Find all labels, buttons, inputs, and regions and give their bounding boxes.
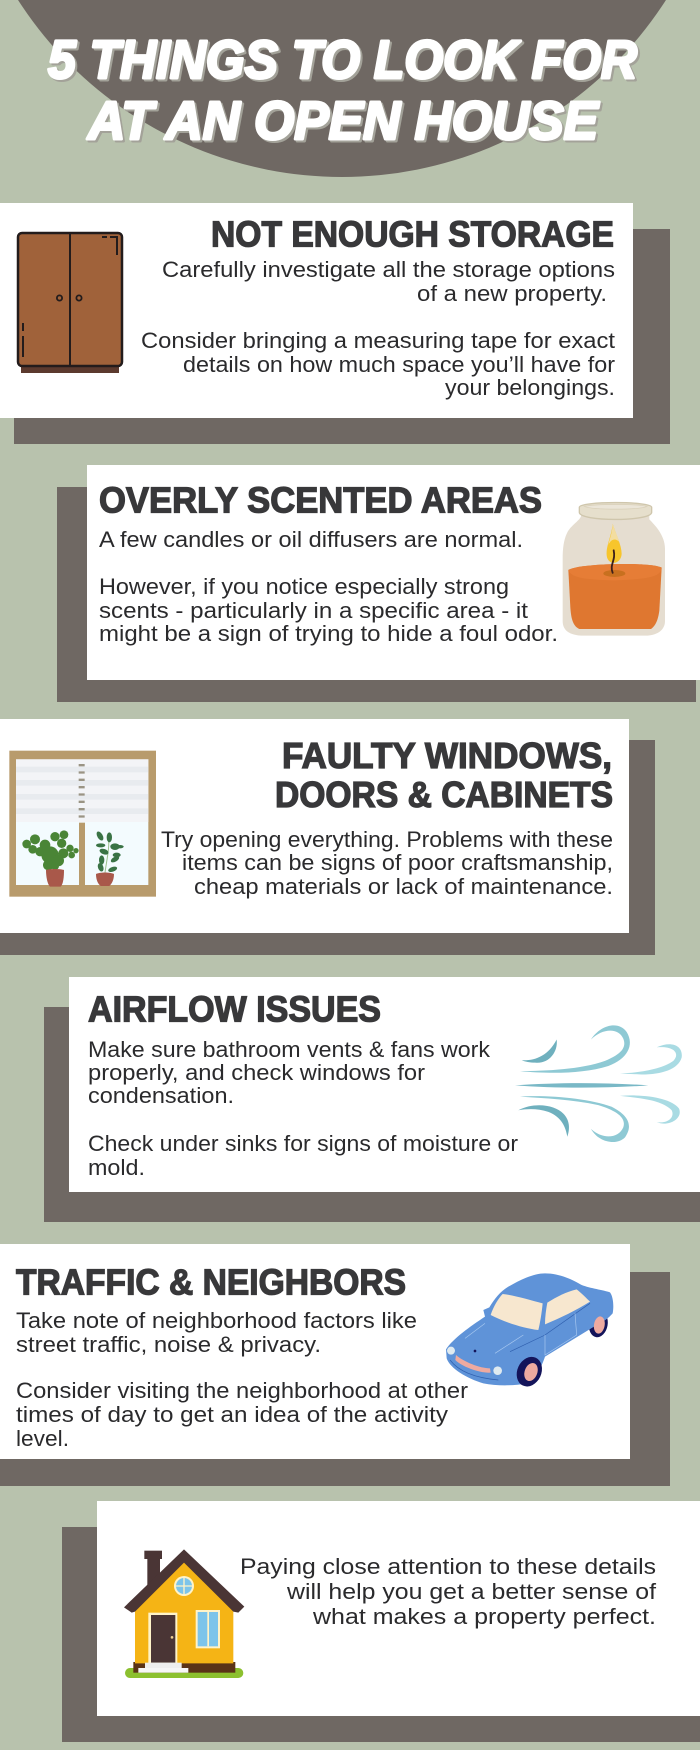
body text: your belongings. [445, 375, 615, 400]
body text: Check under sinks for signs of moisture or [88, 1131, 518, 1156]
heading: TRAFFIC & NEIGHBORS [16, 1262, 406, 1302]
panel: not enough storage [0, 203, 670, 444]
body text: scents - particularly in a specific area - it [99, 598, 528, 623]
body text: Paying close attention to these details [240, 1554, 656, 1579]
panel: traffic and neighbors [0, 1244, 670, 1486]
body text: level. [16, 1426, 69, 1451]
title: AT AN OPEN HOUSE [86, 91, 600, 151]
body text: condensation. [88, 1083, 234, 1108]
icon: cabinet [18, 232, 122, 373]
heading: AIRFLOW ISSUES [88, 988, 381, 1030]
body text: properly, and check windows for [88, 1060, 425, 1085]
heading: FAULTY WINDOWS, [282, 735, 612, 776]
panel: overly scented areas [57, 465, 700, 702]
body text: Carefully investigate all the storage options [162, 257, 615, 282]
heading: OVERLY SCENTED AREAS [99, 480, 542, 520]
body text: will help you get a better sense of [286, 1579, 657, 1604]
heading: DOORS & CABINETS [275, 774, 613, 815]
header circle [0, 0, 700, 177]
body text [99, 527, 558, 646]
icon: window with plants [9, 751, 156, 897]
body text: Take note of neighborhood factors like [16, 1308, 417, 1333]
body text: Consider bringing a measuring tape for exact [141, 328, 615, 353]
body text: Consider visiting the neighborhood at other [16, 1378, 468, 1403]
panel: closing note [62, 1501, 700, 1742]
body text: items can be signs of poor craftsmanship, [182, 850, 613, 875]
body text: times of day to get an idea of the activity [16, 1402, 448, 1427]
body text [161, 827, 613, 899]
body text: what makes a property perfect. [312, 1604, 656, 1629]
panel: faulty windows, doors and cabinets [0, 719, 655, 955]
icon: blue car [446, 1273, 613, 1391]
icon: yellow house [124, 1549, 244, 1678]
body text [240, 1554, 657, 1629]
body text: However, if you notice especially strong [99, 574, 509, 599]
body text: Make sure bathroom vents & fans work [88, 1037, 491, 1062]
body text: Try opening everything. Problems with these [161, 827, 613, 852]
heading [275, 735, 613, 815]
body text [88, 1037, 518, 1180]
body text [141, 257, 615, 400]
body text: of a new property. [417, 281, 607, 306]
icon: wind [515, 1025, 682, 1142]
body text: street traffic, noise & privacy. [16, 1332, 321, 1357]
icon: candle jar [563, 503, 665, 636]
body text: might be a sign of trying to hide a foul odor. [99, 621, 558, 646]
title [48, 30, 637, 151]
body text [16, 1308, 468, 1451]
title: 5 THINGS TO LOOK FOR [48, 30, 637, 90]
heading: NOT ENOUGH STORAGE [211, 214, 614, 254]
body text: cheap materials or lack of maintenance. [194, 874, 613, 899]
panel: airflow issues [44, 977, 700, 1222]
body text: mold. [88, 1155, 145, 1180]
body text: A few candles or oil diffusers are normal. [99, 527, 523, 552]
body text: details on how much space you’ll have for [183, 352, 615, 377]
